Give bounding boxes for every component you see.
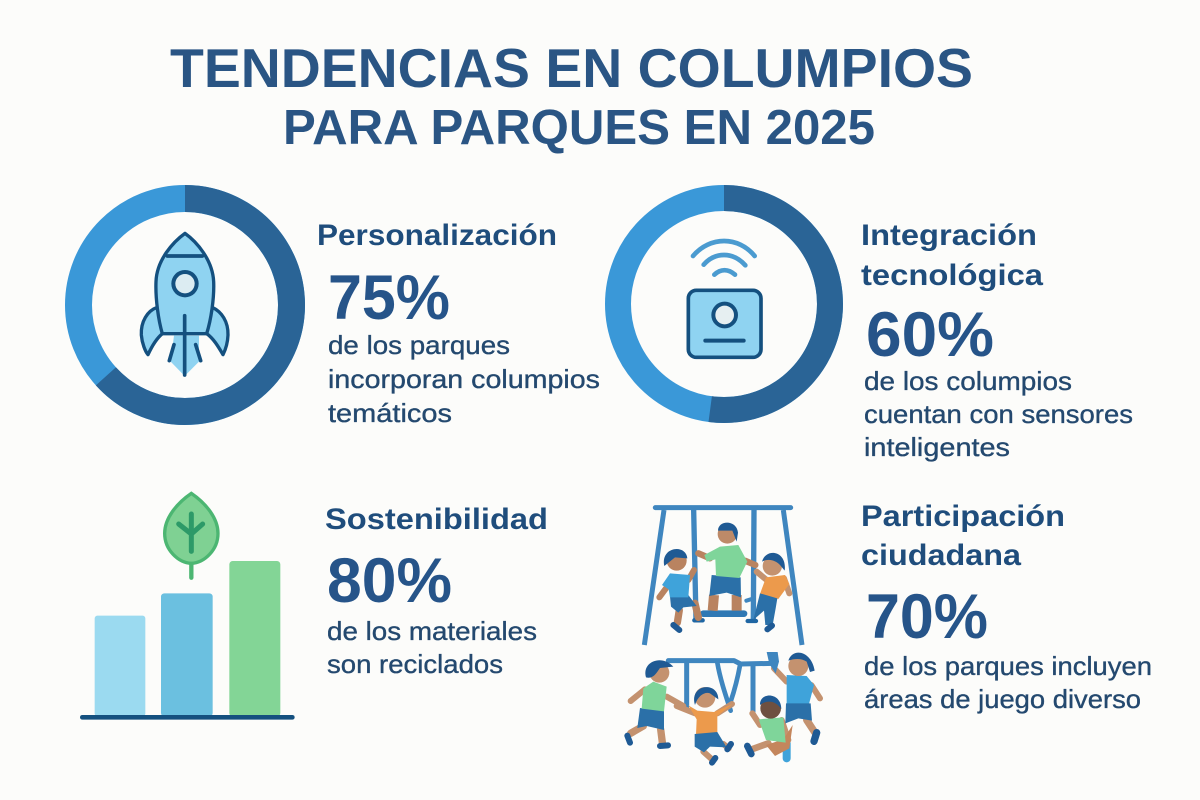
title: TENDENCIAS EN COLUMPIOS: [170, 37, 973, 99]
title: [170, 37, 973, 155]
heading: ciudadana: [861, 539, 1021, 572]
bar: light blue: [95, 616, 145, 716]
icon: leaf: [165, 493, 218, 578]
heading: Personalización: [317, 219, 557, 252]
child: far right, blue shirt: [767, 652, 820, 741]
description: de los columpios: [864, 366, 1072, 396]
statistic: 70%: [866, 582, 988, 652]
icon: rocket: [141, 233, 228, 376]
bar: green: [229, 561, 280, 716]
swing frame: [644, 508, 802, 645]
description: de los parques incluyen: [864, 651, 1152, 681]
child: lower right, dark skin: [747, 695, 793, 756]
description: cuentan con sensores: [864, 399, 1133, 429]
panel: sostenibilidad: [80, 493, 548, 720]
panel: integración tecnológica: [618, 198, 1133, 462]
donut chart: 60%: [618, 198, 830, 410]
description: [327, 616, 537, 679]
child: left, blue shirt: [659, 549, 698, 630]
bar: mid blue: [161, 593, 213, 716]
heading: Integración: [861, 219, 1037, 252]
heading: [861, 219, 1043, 292]
description: de los parques: [328, 330, 510, 360]
description: de los materiales: [327, 616, 537, 646]
child: center, orange shirt: [677, 687, 733, 763]
statistic: 60%: [866, 300, 994, 370]
panel: personalización: [78, 198, 600, 428]
statistic: 80%: [327, 546, 452, 616]
description: incorporan columpios: [328, 364, 600, 394]
bar chart with leaf: [80, 493, 295, 720]
description: áreas de juego diverso: [864, 684, 1141, 714]
heading: [861, 500, 1065, 572]
description: temáticos: [328, 398, 452, 428]
description: [864, 651, 1152, 714]
heading: tecnológica: [861, 259, 1043, 292]
icon: smart sensor with wifi: [688, 241, 761, 357]
baseline: [80, 715, 295, 720]
play frame: [668, 661, 787, 758]
donut chart: 75%: [78, 198, 292, 412]
child: center, green shirt: [698, 523, 755, 611]
description: [864, 366, 1133, 462]
illustration: children on swing set: [644, 508, 802, 645]
statistic: 75%: [328, 263, 450, 333]
description: son reciclados: [327, 649, 503, 679]
title: PARA PARQUES EN 2025: [283, 101, 875, 155]
child: far left, green shirt: [627, 660, 683, 746]
child: right, orange shirt: [746, 553, 789, 629]
heading: Participación: [861, 500, 1065, 533]
description: [328, 330, 600, 428]
illustration: children at play: [627, 652, 820, 763]
description: inteligentes: [864, 432, 1010, 462]
panel: participación ciudadana: [627, 500, 1152, 763]
heading: Sostenibilidad: [325, 503, 548, 536]
